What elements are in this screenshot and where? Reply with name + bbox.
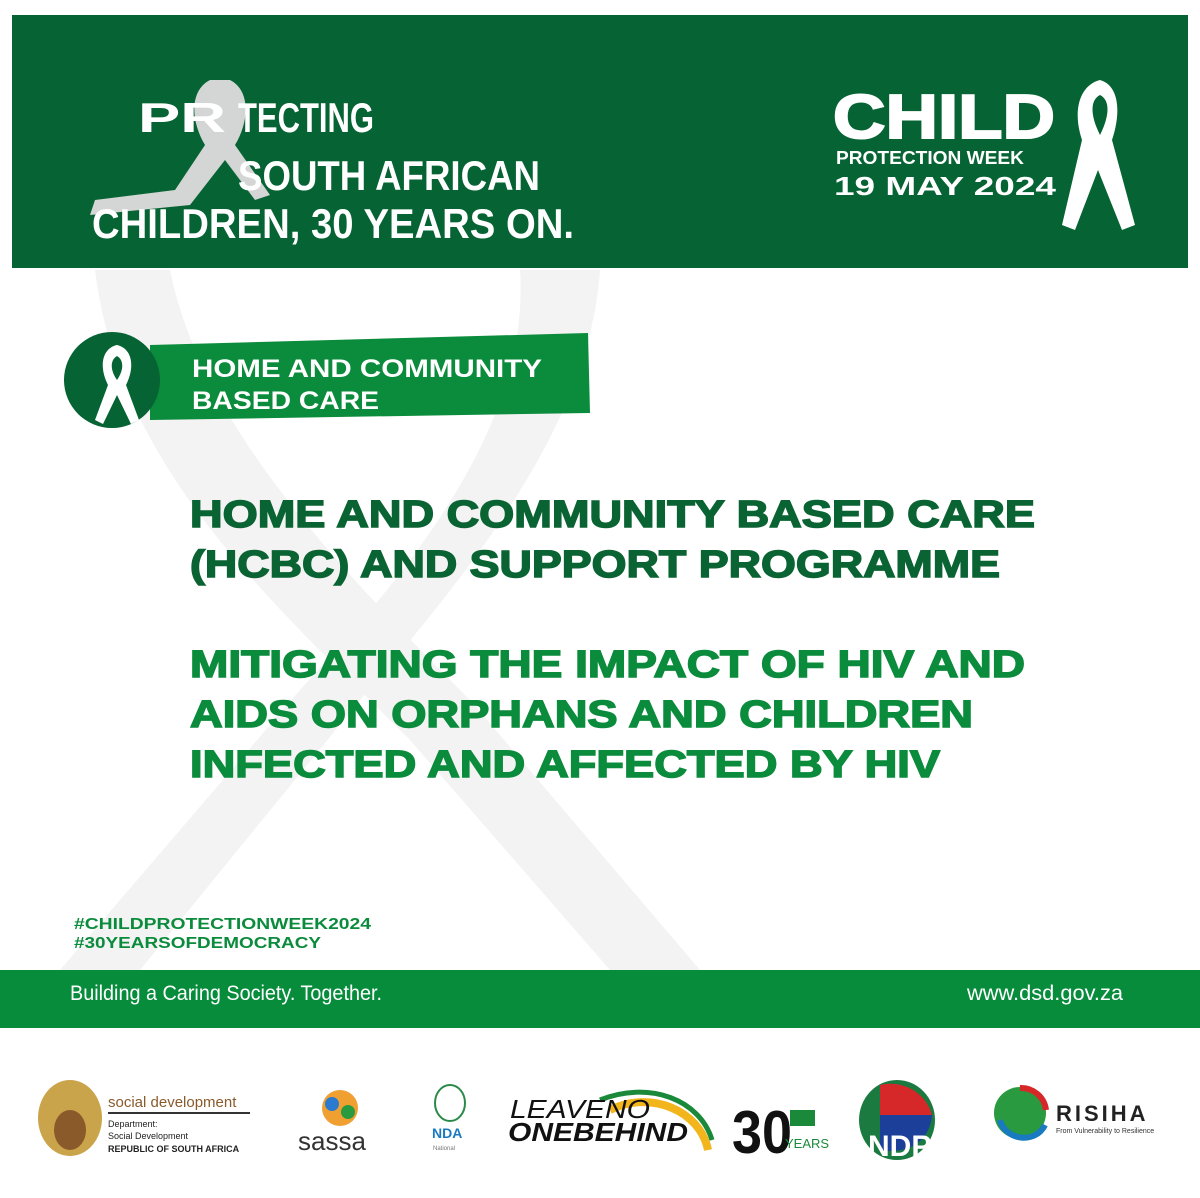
main heading bbox=[190, 494, 1035, 586]
subheading bbox=[190, 644, 1025, 786]
logo: social development: REPUBLIC OF SOUTH AFRICA bbox=[108, 1144, 240, 1154]
footer band: www.dsd.gov.za bbox=[966, 982, 1123, 1005]
header banner bbox=[12, 15, 1188, 268]
logo: RISIHA bbox=[994, 1087, 1154, 1139]
child protection week logo: CHILD bbox=[833, 83, 1055, 152]
logo: NDA: NDA bbox=[432, 1125, 462, 1141]
logo: NDP 2030 bbox=[859, 1080, 935, 1163]
logo: sassa: sassa bbox=[298, 1126, 366, 1156]
section badge: BASED CARE bbox=[192, 387, 379, 415]
logo: leave no one behind: ONEBEHIND bbox=[508, 1117, 688, 1147]
logo: sassa bbox=[298, 1090, 366, 1156]
header title: CHILDREN, 30 YEARS ON. bbox=[92, 200, 574, 247]
footer band bbox=[0, 970, 1200, 1028]
child protection week logo: 19 MAY 2024 bbox=[834, 171, 1057, 201]
header title: PR bbox=[138, 94, 226, 141]
logo: social development: Department: bbox=[108, 1119, 158, 1129]
footer band: Building a Caring Society. Together. bbox=[70, 982, 382, 1005]
logo: NDA bbox=[432, 1085, 465, 1152]
header ribbon icon bbox=[90, 80, 270, 215]
section badge: HOME AND COMMUNITY bbox=[192, 355, 542, 383]
subheading: MITIGATING THE IMPACT OF HIV AND bbox=[190, 644, 1025, 686]
main heading: HOME AND COMMUNITY BASED CARE bbox=[190, 494, 1035, 536]
logo: 30 years: YEARS bbox=[785, 1136, 829, 1151]
logo: NDA: National bbox=[433, 1146, 455, 1152]
logo: social development: social development bbox=[108, 1094, 237, 1111]
subheading: AIDS ON ORPHANS AND CHILDREN bbox=[190, 694, 973, 736]
header title bbox=[92, 94, 574, 247]
logo: RISIHA: From Vulnerability to Resilience bbox=[1056, 1128, 1154, 1135]
badge ribbon icon bbox=[95, 345, 139, 424]
hashtags: #30YEARSOFDEMOCRACY bbox=[74, 935, 321, 952]
logo: RISIHA: RISIHA bbox=[1056, 1101, 1149, 1126]
background ribbon watermark bbox=[60, 270, 700, 970]
logo: 30 years: 30 bbox=[732, 1099, 792, 1166]
logo: leave no one behind: LEAVENO bbox=[510, 1094, 650, 1124]
hashtags bbox=[74, 916, 371, 952]
logo: 30 years bbox=[732, 1099, 829, 1166]
subheading: INFECTED AND AFFECTED BY HIV bbox=[190, 744, 941, 786]
header title: SOUTH AFRICAN bbox=[238, 152, 540, 199]
hashtags: #CHILDPROTECTIONWEEK2024 bbox=[74, 916, 371, 933]
logo: NDP 2030: NDP bbox=[868, 1130, 931, 1163]
logo: leave no one behind bbox=[508, 1092, 712, 1150]
header title: TECTING bbox=[238, 94, 374, 141]
child protection week logo bbox=[833, 80, 1135, 230]
logos row bbox=[38, 1080, 1154, 1166]
child protection week logo: PROTECTION WEEK bbox=[836, 148, 1024, 168]
section badge bbox=[64, 332, 590, 428]
logo: social development bbox=[38, 1080, 250, 1156]
logo: social development: Social Development bbox=[108, 1131, 189, 1141]
main heading: (HCBC) AND SUPPORT PROGRAMME bbox=[190, 544, 1000, 586]
